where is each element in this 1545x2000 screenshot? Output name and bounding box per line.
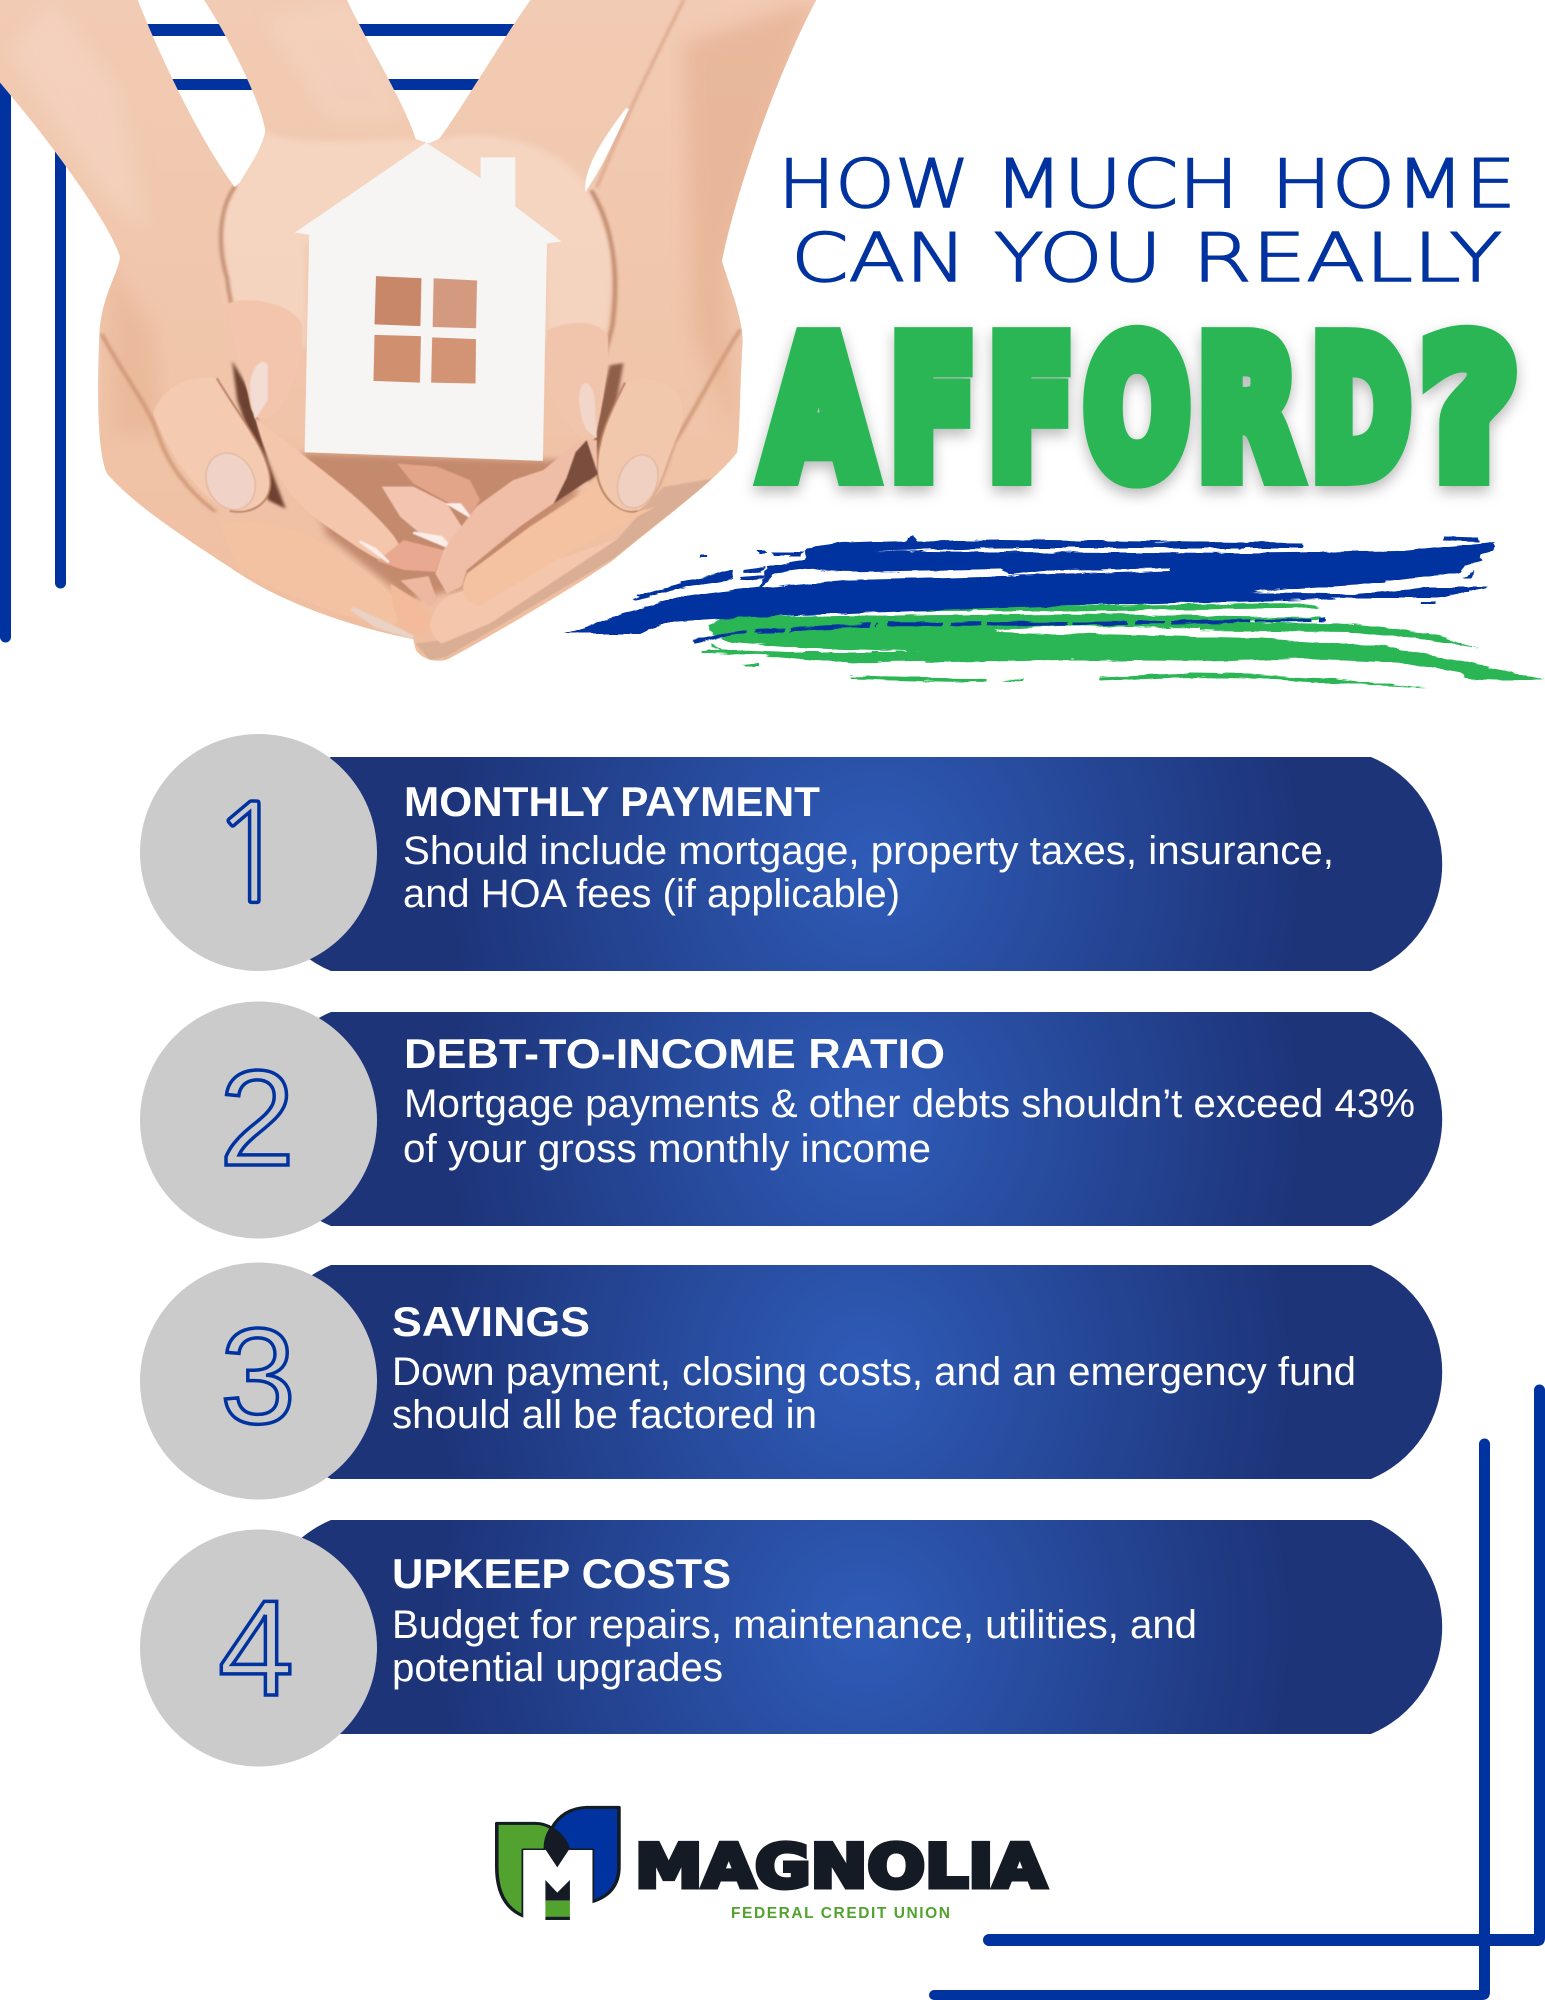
step 1 number: 1: [209, 786, 291, 922]
step 4: [140, 1520, 1442, 1766]
step 3: [140, 1262, 1442, 1500]
step 4 number: 4: [218, 1572, 294, 1724]
heading: AFFORD?: D: [1312, 302, 1410, 518]
logo wordmark: MAGNOLIA: [635, 1832, 1047, 1902]
right thumb: [597, 393, 681, 512]
step 3 bar: [260, 1265, 1442, 1479]
hands: [0, 0, 827, 678]
step 2 number: 2: [219, 1042, 295, 1194]
step 3 circle: [140, 1262, 377, 1500]
step 3 description: Down payment, closing costs, and an emergency fund: [392, 1350, 1356, 1394]
logo: Magnolia Federal Credit Union: [497, 1807, 1047, 1922]
right lower finger: [430, 539, 617, 644]
inner left finger: [227, 300, 302, 419]
heading: CAN: [791, 219, 967, 297]
right index finger: [435, 440, 597, 594]
step 1 title: MONTHLY PAYMENT: [404, 778, 820, 825]
house windows: [373, 276, 477, 383]
step 1 description: and HOA fees (if applicable): [403, 872, 900, 916]
left bottom index finger: [390, 584, 418, 634]
step 3 number: 3: [220, 1300, 296, 1452]
heading: REALLY: [1192, 219, 1502, 297]
step 2 bar: [260, 1012, 1442, 1226]
step 4 title: UPKEEP COSTS: [392, 1550, 731, 1597]
top-left blue frame lines: [0, 24, 530, 642]
step 2 description: Mortgage payments & other debts shouldn’t exceed 43%: [404, 1082, 1415, 1126]
step 2 circle: [140, 1002, 377, 1238]
heading: HOW: [778, 145, 970, 223]
brush strokes: [564, 535, 1545, 688]
heading: HOME: [1271, 145, 1516, 223]
heading: MUCH: [994, 145, 1239, 223]
step 1 circle: [140, 734, 377, 971]
right large finger: [462, 494, 654, 604]
step 4 description: Budget for repairs, maintenance, utilities, and: [392, 1603, 1197, 1647]
logo mark: [497, 1807, 619, 1922]
step 4 bar: [260, 1520, 1442, 1734]
heading: AFFORD?: ?: [1422, 302, 1517, 518]
inner lower fingers: [255, 417, 401, 564]
white streaks: [762, 568, 1200, 634]
step 1: [140, 734, 1442, 971]
hand creases: [102, 0, 740, 512]
photo: hands holding paper house: [0, 0, 827, 678]
inner right finger: [546, 323, 608, 440]
left thumb: [153, 377, 270, 512]
step 4 circle: [140, 1530, 377, 1766]
step 2 title: DEBT-TO-INCOME RATIO: [404, 1030, 945, 1077]
heading: AFFORD?: [765, 302, 1517, 518]
step 4 description: potential upgrades: [392, 1646, 723, 1690]
gap between arms: [587, 109, 628, 187]
step 1 description: Should include mortgage, property taxes, insurance,: [403, 829, 1334, 873]
heading: AFFORD?: F: [891, 302, 975, 518]
logo tagline: FEDERAL CREDIT UNION: [731, 1905, 950, 1922]
heading: [778, 145, 1516, 297]
dark crevices: [232, 361, 286, 509]
heading: AFFORD?: R: [1198, 302, 1298, 518]
right lower hand edge: [415, 478, 714, 660]
step 3 title: SAVINGS: [392, 1298, 590, 1345]
blue dashes over green: [693, 620, 1325, 642]
heading: AFFORD?: O: [1085, 302, 1189, 518]
bottom-right blue frame lines: [929, 1384, 1545, 2000]
step 1 bar: [260, 757, 1442, 971]
blue brush: [564, 535, 1495, 634]
step 2 description: of your gross monthly income: [403, 1127, 931, 1171]
green brush: [703, 603, 1545, 688]
heading: AFFORD?: F: [989, 302, 1073, 518]
heading: AFFORD?: A: [765, 302, 872, 518]
paper house: [295, 143, 561, 461]
heading: YOU: [994, 219, 1162, 297]
step 3 description: should all be factored in: [392, 1393, 817, 1437]
left bottom palm: [600, 412, 601, 413]
step 2: [140, 1002, 1442, 1238]
